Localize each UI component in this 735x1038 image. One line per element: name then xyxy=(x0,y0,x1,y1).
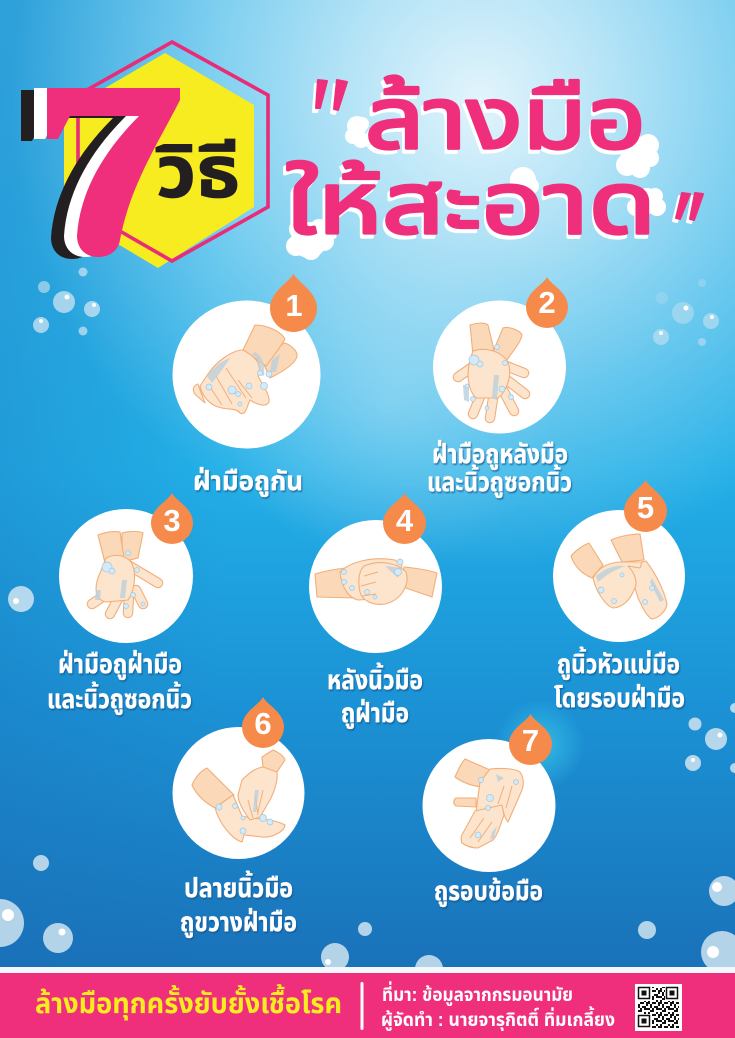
label: ถูรอบข้อมือ xyxy=(434,876,543,907)
number drop 1 xyxy=(270,274,317,332)
hands illustration xyxy=(315,559,437,604)
QR code xyxy=(635,984,682,1031)
hands illustration xyxy=(458,323,525,418)
number drop 3 xyxy=(151,493,193,544)
hands illustration xyxy=(193,325,297,414)
step 5 xyxy=(553,480,685,713)
label: ถูขวางฝ่ามือ xyxy=(180,907,297,938)
วิธี word: วิธี xyxy=(156,133,240,213)
step 3 xyxy=(47,493,193,715)
soap foam clouds xyxy=(286,116,666,260)
label: โดยรอบฝ่ามือ xyxy=(554,683,685,713)
circle xyxy=(172,300,320,448)
number drop 6: 6 xyxy=(254,706,272,741)
circle xyxy=(422,739,556,872)
label: ปลายนิ้วมือ xyxy=(184,871,293,903)
number drop 6 xyxy=(242,697,284,748)
label: ถูนิ้วหัวแม่มือ xyxy=(557,647,680,680)
title line 2 shadow: ให้สะอาด xyxy=(283,160,655,256)
step 6 xyxy=(172,697,304,938)
number drop 1: 1 xyxy=(285,288,303,323)
number drop 2 xyxy=(526,277,568,328)
circle xyxy=(553,510,685,642)
hexagon outline xyxy=(78,42,268,261)
title line 1 shadow: ล้างมือ xyxy=(362,75,645,171)
closing quote xyxy=(673,193,703,223)
number drop 5 xyxy=(624,480,667,532)
logo: 7 วิธี badge xyxy=(21,42,268,268)
hands illustration xyxy=(571,534,667,619)
circle xyxy=(433,300,566,434)
label: และนิ้วถูซอกนิ้ว xyxy=(47,682,192,715)
circle xyxy=(309,520,442,653)
label: หลังนิ้วมือ xyxy=(327,663,423,695)
opening quote xyxy=(313,80,347,114)
circle xyxy=(59,509,193,643)
step 4 xyxy=(309,493,442,729)
hands illustration xyxy=(454,759,523,848)
slogan: ล้างมือทุกครั้งยับยั้งเชื้อโรค xyxy=(35,983,342,1020)
label xyxy=(327,663,423,729)
number drop 7: 7 xyxy=(522,723,539,758)
label xyxy=(427,439,572,498)
label: ฝ่ามือถูฝ่ามือ xyxy=(58,649,182,680)
label: ฝ่ามือถูกัน xyxy=(193,466,303,497)
divider xyxy=(360,982,364,1030)
source credit: ที่มา: ข้อมูลจากกรมอนามัย xyxy=(382,981,573,1006)
number drop 7 xyxy=(509,714,552,765)
label: และนิ้วถูซอกนิ้ว xyxy=(427,465,572,498)
step 2 xyxy=(427,277,572,498)
footer band xyxy=(0,967,735,1038)
hands illustration xyxy=(92,532,158,614)
title line 2: ให้สะอาด xyxy=(286,156,656,252)
number drop 3: 3 xyxy=(163,503,181,538)
label: ฝ่ามือถูหลังมือ xyxy=(432,439,568,470)
numeral 7 xyxy=(21,88,180,259)
hands illustration xyxy=(192,750,285,842)
number drop 5: 5 xyxy=(637,490,654,525)
number drop 4: 4 xyxy=(396,503,414,538)
title line 1: ล้างมือ xyxy=(365,71,646,167)
title xyxy=(283,71,703,260)
step 7 xyxy=(422,714,556,907)
label: ถูฝ่ามือ xyxy=(341,698,409,729)
yellow hexagon xyxy=(64,53,254,268)
step 1 xyxy=(172,274,320,497)
soap bubbles xyxy=(0,268,735,983)
label xyxy=(180,871,297,938)
label xyxy=(47,649,192,715)
number drop 2: 2 xyxy=(538,285,556,320)
number drop 4 xyxy=(383,493,426,544)
organiser credit: ผู้จัดทำ : นายจารุกิตติ์ ทิ่มเกลี้ยง xyxy=(381,1006,615,1031)
circle xyxy=(172,727,304,859)
label xyxy=(554,647,685,713)
